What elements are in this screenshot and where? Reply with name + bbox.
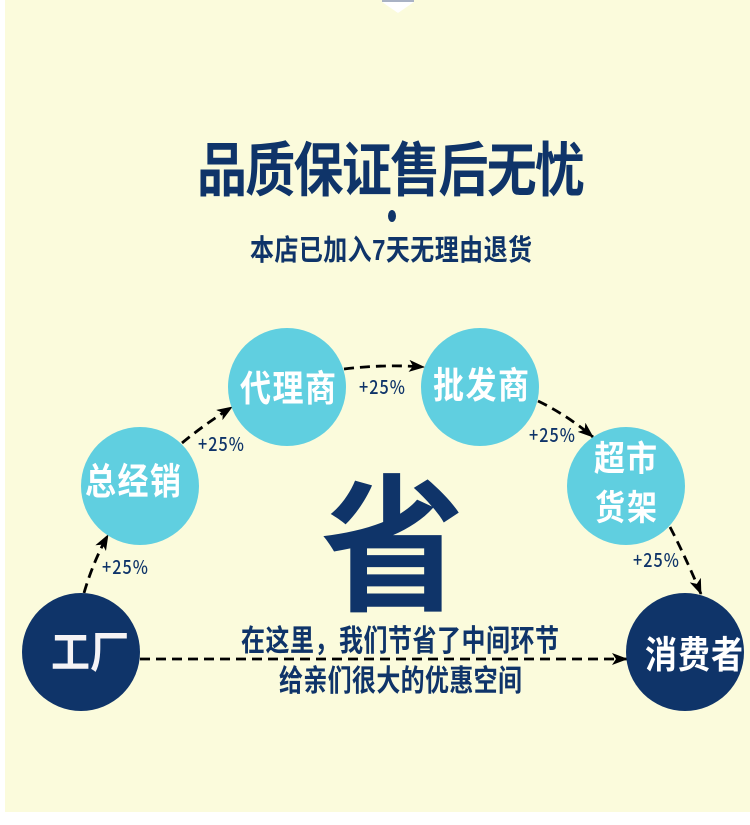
arrow: agent to wholesaler bbox=[344, 366, 424, 369]
title dot bbox=[388, 210, 396, 222]
label: +25% agent: +25% bbox=[359, 374, 405, 400]
title: 品质保证售后无忧 bbox=[197, 137, 585, 204]
arrow: supermarket to consumer bbox=[670, 527, 701, 594]
node: wholesaler bbox=[421, 328, 539, 446]
arrow: general distributor to agent bbox=[182, 407, 232, 443]
label: +25% distributor: +25% bbox=[198, 431, 244, 457]
node: supermarket shelf: 货架 bbox=[595, 488, 657, 528]
node: supermarket shelf bbox=[567, 427, 685, 545]
node: factory bbox=[22, 593, 140, 711]
node: consumer: 消费者 bbox=[645, 635, 743, 677]
arrow: factory to consumer bbox=[140, 658, 627, 660]
big character: 省 bbox=[320, 465, 464, 630]
label: +25% supermarket: +25% bbox=[633, 547, 679, 573]
node: factory: 工厂 bbox=[51, 629, 129, 677]
node: general distributor bbox=[81, 427, 199, 545]
node: general distributor: 总经销 bbox=[85, 462, 181, 503]
arrow: factory to general distributor bbox=[84, 535, 108, 593]
node: wholesaler: 批发商 bbox=[433, 366, 529, 407]
node: supermarket shelf: 超市 bbox=[594, 440, 657, 479]
subtitle: 本店已加入7天无理由退货 bbox=[250, 234, 532, 267]
text: savings line one: 在这里，我们节省了中间环节 bbox=[241, 623, 559, 658]
icon: top notch bbox=[382, 0, 414, 13]
node: agent: 代理商 bbox=[240, 369, 336, 410]
label: +25% factory: +25% bbox=[102, 554, 148, 580]
arrow: wholesaler to supermarket bbox=[538, 401, 593, 437]
label: +25% wholesaler: +25% bbox=[529, 422, 575, 448]
node: consumer bbox=[626, 593, 744, 711]
node: agent bbox=[228, 328, 346, 446]
text: savings line two: 给亲们很大的优惠空间 bbox=[279, 663, 522, 698]
